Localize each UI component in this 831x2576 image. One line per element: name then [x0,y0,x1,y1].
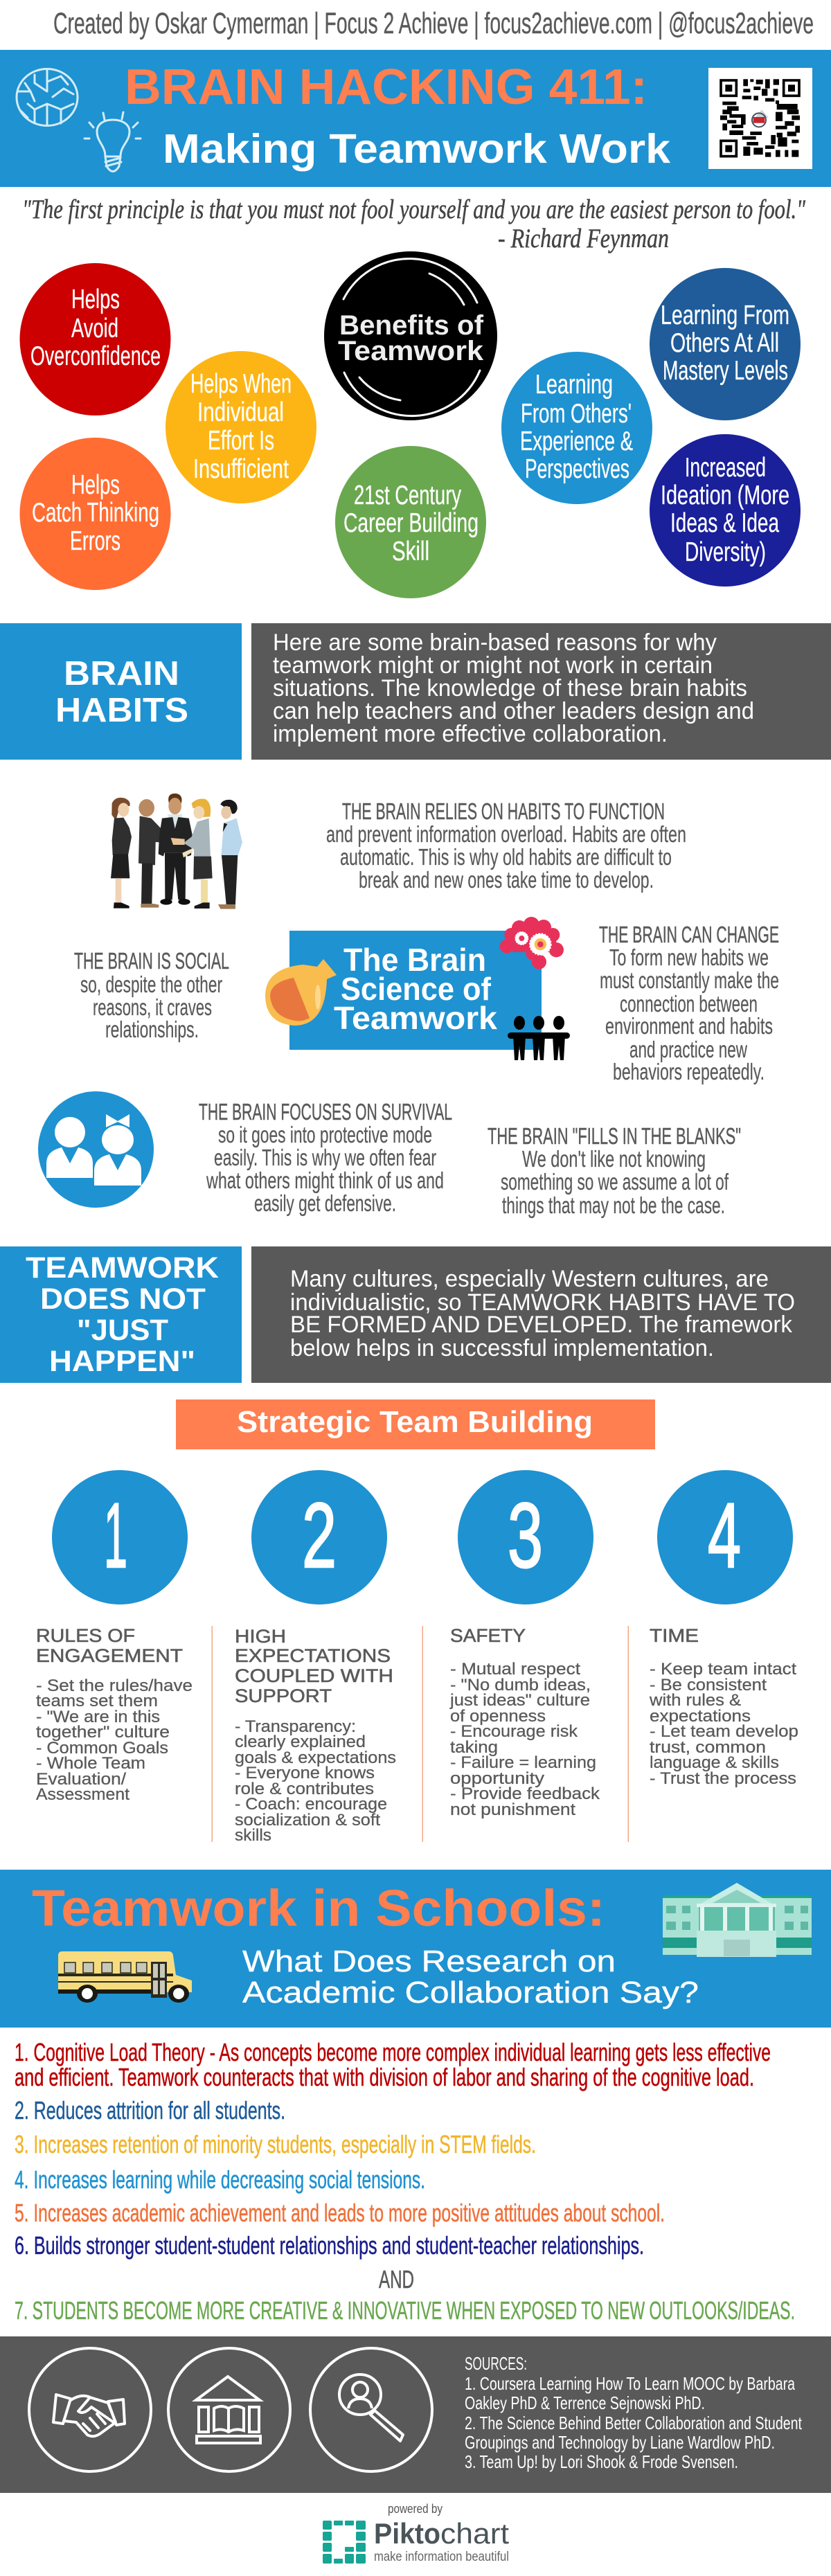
panel: brain habits intro [251,623,831,760]
column: time: - Let team develop [650,1722,798,1741]
benefit: catch thinking errors: Helps [71,470,120,500]
column: high expectations: socialization & soft [235,1811,380,1830]
benefit: learning at all mastery levels: Others At All [670,328,779,358]
panel: brain habits label: HABITS [55,692,188,729]
text: brain is social: so, despite the other [80,972,222,997]
text: brain relies on habits: break and new ones take time to develop. [359,867,654,893]
research finding 2: 2. Reduces attrition for all students. [15,2096,285,2125]
column: time: - Be consistent [650,1676,767,1694]
step 4 number: 4 [708,1485,741,1587]
text: brain relies on habits: THE BRAIN RELIES ON HABITS TO FUNCTION [342,798,665,824]
column: high expectations: - Everyone knows [235,1764,375,1782]
benefit: catch thinking errors [19,438,170,590]
column: rules of engagement: Assessment [36,1785,129,1804]
benefit: learning from others experience: Perspectives [525,454,629,484]
panel: culture explanation: Many cultures, especially Western cultures, are [290,1266,769,1292]
panel: culture explanation [251,1246,831,1383]
column: safety: SAFETY [450,1625,526,1646]
text: brain relies on habits [326,798,686,893]
panel: brain habits intro: Here are some brain-based reasons for why [273,629,717,656]
column: high expectations: - Coach: encourage [235,1795,387,1814]
subheading: research question: What Does Research on [242,1944,616,1978]
quote [22,195,805,253]
column: time: TIME [650,1625,699,1646]
column: rules of engagement: RULES OF [36,1625,135,1646]
heading: Brain Hacking 411: BRAIN HACKING 411: [125,60,647,115]
text: brain relies on habits: and prevent information overload. Habits are often [326,821,686,847]
icon: school bus [58,1951,192,2003]
text: brain is social [74,948,229,1042]
icon: two people in blue circle [38,1091,154,1208]
icon: library with book [168,2348,290,2471]
icon: school building [663,1883,812,1957]
research finding 1 [15,2038,771,2091]
piktochart logo: make information beautiful [374,2550,509,2564]
benefit: catch thinking errors: Catch Thinking [32,498,159,528]
column: time: - Trust the process [650,1769,796,1788]
heading: strategic team building [176,1399,655,1449]
column: rules of engagement: - Common Goals [36,1739,168,1757]
powered by label: powered by [388,2502,443,2516]
column: rules of engagement [36,1625,193,1804]
benefit: career building skill: Career Building [343,508,479,538]
column: time: trust, common [650,1738,766,1757]
panel: teamwork does not just happen: HAPPEN" [49,1345,195,1378]
column: safety: - "No dumb ideas, [450,1676,591,1694]
step 3 number: 3 [508,1485,543,1587]
panel: brain habits label: BRAIN [64,655,179,692]
icon: cloud with gears [500,917,564,969]
benefit: increased ideation: Ideation (More [661,481,789,510]
benefit: career building skill: 21st Century [354,481,461,510]
column: rules of engagement: - Set the rules/have [36,1676,193,1695]
panel: culture explanation: below helps in successful implementation. [290,1335,714,1361]
panel: brain habits label [0,623,242,760]
sources text [465,2353,803,2472]
benefit: increased ideation: Diversity) [685,537,766,567]
piktochart logo: Pikto [374,2517,440,2550]
banner: teamwork in schools [0,1870,831,2028]
benefit: learning from others experience: From Others' [521,399,632,429]
piktochart logo: chart [440,2517,509,2550]
column: safety: of openness [450,1707,546,1726]
benefit: career building skill: Skill [392,537,429,566]
research finding 3: 3. Increases retention of minority students, especially in STEM fields. [15,2130,536,2158]
column: safety: - Failure = learning [450,1753,596,1772]
panel: brain habits intro: implement more effective collaboration. [273,721,668,747]
subheading: research question [242,1944,699,2010]
text: brain can change: behaviors repeatedly. [613,1059,765,1084]
column: high expectations: HIGH [235,1626,286,1647]
benefit: learning from others experience: Learning [535,370,613,400]
panel: sources footer [0,2336,831,2493]
panel: teamwork does not just happen: TEAMWORK [26,1251,219,1285]
text: brain can change: To form new habits we [609,945,769,970]
step 1 number: 1 [104,1485,127,1587]
column: high expectations: SUPPORT [235,1685,332,1706]
benefit: individual effort insufficient [166,351,316,503]
column: high expectations: EXPECTATIONS [235,1645,391,1666]
text: brain fills in the blanks: We don't like not knowing [522,1146,706,1172]
center badge: benefits of teamwork [324,251,497,420]
icon: light bulb [84,112,141,172]
column: safety: - Provide feedback [450,1785,600,1803]
title banner [0,50,831,187]
column: safety: - Mutual respect [450,1660,580,1679]
step 2 number: 2 [302,1485,337,1587]
benefit: individual effort insufficient: Individual [197,397,284,427]
text: brain focuses on survival: so it goes into protective mode [218,1122,432,1147]
icon: three linked people [508,1016,570,1060]
step 4 number [657,1470,793,1604]
column: high expectations: role & contributes [235,1780,374,1798]
research finding 4: 4. Increases learning while decreasing social tensions. [15,2165,425,2194]
benefit: avoid overconfidence: Avoid [71,314,118,343]
panel: brain habits intro: teamwork might or might not work in certain [273,652,713,679]
column: high expectations: COUPLED WITH [235,1665,393,1686]
panel: culture explanation: BE FORMED AND DEVELOPED. The framework [290,1312,793,1338]
column: rules of engagement: - "We are in this [36,1708,160,1726]
sources text: 3. Team Up! by Lori Shook & Frode Svensen. [465,2451,738,2472]
text: brain focuses on survival: easily. This is why we often fear [214,1145,436,1170]
column: time [649,1625,798,1788]
column: time: language & skills [650,1753,779,1772]
benefit: avoid overconfidence: Overconfidence [30,341,161,371]
subheading: research question: Academic Collaboration Say? [242,1976,699,2010]
title block: brain science of teamwork: Science of [341,971,492,1007]
text: brain can change: connection between [620,991,758,1017]
text: brain focuses on survival: what others might think of us and [206,1168,444,1193]
text: brain is social: THE BRAIN IS SOCIAL [74,948,229,974]
panel: brain habits intro: situations. The knowledge of these brain habits [273,675,747,701]
text: brain fills in the blanks [488,1123,741,1218]
text: brain is social: reasons, it craves [93,994,212,1020]
center badge: benefits of teamwork: Teamwork [338,336,484,366]
benefit: avoid overconfidence [19,263,170,415]
column: rules of engagement: teams set them [36,1692,158,1710]
QR code [708,68,812,169]
column: safety [449,1625,600,1819]
panel: brain habits intro: can help teachers and other leaders design and [273,698,754,724]
column: high expectations [235,1626,396,1845]
column: time: - Keep team intact [650,1660,796,1679]
text: brain can change: and practice new [629,1037,747,1062]
text: brain is social: relationships. [105,1017,199,1042]
quote attribution: - Richard Feynman [498,224,669,253]
panel: teamwork does not just happen [0,1246,242,1383]
column: rules of engagement: - Whole Team [36,1754,145,1773]
column: high expectations: skills [235,1826,271,1845]
text: brain can change [599,922,779,1084]
column: high expectations: - Transparency: [235,1717,356,1736]
column: safety: opportunity [450,1769,544,1788]
benefit: career building skill [335,446,486,598]
step 2 number [251,1470,387,1604]
benefit: learning from others experience [501,352,652,504]
benefit: increased ideation: Ideas & Idea [670,508,779,538]
benefit: individual effort insufficient: Insufficient [193,454,289,484]
text: brain fills in the blanks: something so we assume a lot of [501,1169,729,1195]
text: brain focuses on survival: easily get defensive. [254,1190,396,1216]
heading: Making Teamwork Work: Making Teamwork Work [163,126,670,172]
benefit: learning from others experience: Experience & [520,427,633,456]
column: safety: taking [450,1738,498,1757]
heading: strategic team building: Strategic Team Building [237,1405,593,1439]
benefit: individual effort insufficient: Effort Is [208,426,274,456]
column: safety: - Encourage risk [450,1722,578,1741]
icon: brain [17,69,78,126]
text: brain fills in the blanks: things that may not be the case. [502,1192,725,1218]
benefit: learning at all mastery levels [650,268,801,420]
sources text: SOURCES: [465,2353,527,2374]
icon: magnifier with person [310,2348,432,2471]
column: rules of engagement: ENGAGEMENT [36,1645,183,1666]
text: brain focuses on survival: THE BRAIN FOCUSES ON SURVIVAL [199,1099,452,1125]
column: rules of engagement: together" culture [36,1723,170,1742]
benefit: increased ideation [650,434,801,587]
benefit: individual effort insufficient: Helps When [190,369,292,399]
title block: brain science of teamwork: Teamwork [334,1000,497,1036]
text: brain focuses on survival [199,1099,452,1216]
center badge: benefits of teamwork: Benefits of [339,310,484,341]
column: high expectations: goals & expectations [235,1748,396,1767]
icon: business team handshake [111,794,242,909]
benefit: increased ideation: Increased [685,453,766,483]
column: safety: just ideas" culture [449,1691,590,1710]
panel: teamwork does not just happen: DOES NOT [40,1282,206,1316]
icon: flask [265,959,337,1026]
piktochart logo [323,2517,509,2564]
panel: teamwork does not just happen: "JUST [77,1314,168,1347]
step 1 number [52,1470,188,1604]
benefit: catch thinking errors: Errors [70,526,120,556]
step 3 number [458,1470,593,1604]
title block: brain science of teamwork: The Brain [343,942,486,978]
panel: culture explanation: individualistic, so TEAMWORK HABITS HAVE TO [290,1289,795,1316]
icon: handshake [29,2348,151,2471]
column: safety: not punishment [450,1800,575,1819]
sources text: Oakley PhD & Terrence Sejnowski PhD. [465,2392,705,2413]
text: brain relies on habits: automatic. This is why old habits are difficult to [340,844,672,870]
heading: teamwork in schools: Teamwork in Schools: [32,1879,605,1937]
column: high expectations: clearly explained [235,1733,366,1751]
title block: brain science of teamwork [265,917,570,1060]
column: time: with rules & [649,1691,741,1710]
column: rules of engagement: Evaluation/ [36,1770,126,1789]
benefit: avoid overconfidence: Helps [71,285,120,314]
column: time: expectations [650,1707,751,1726]
and separator: AND [379,2265,414,2293]
